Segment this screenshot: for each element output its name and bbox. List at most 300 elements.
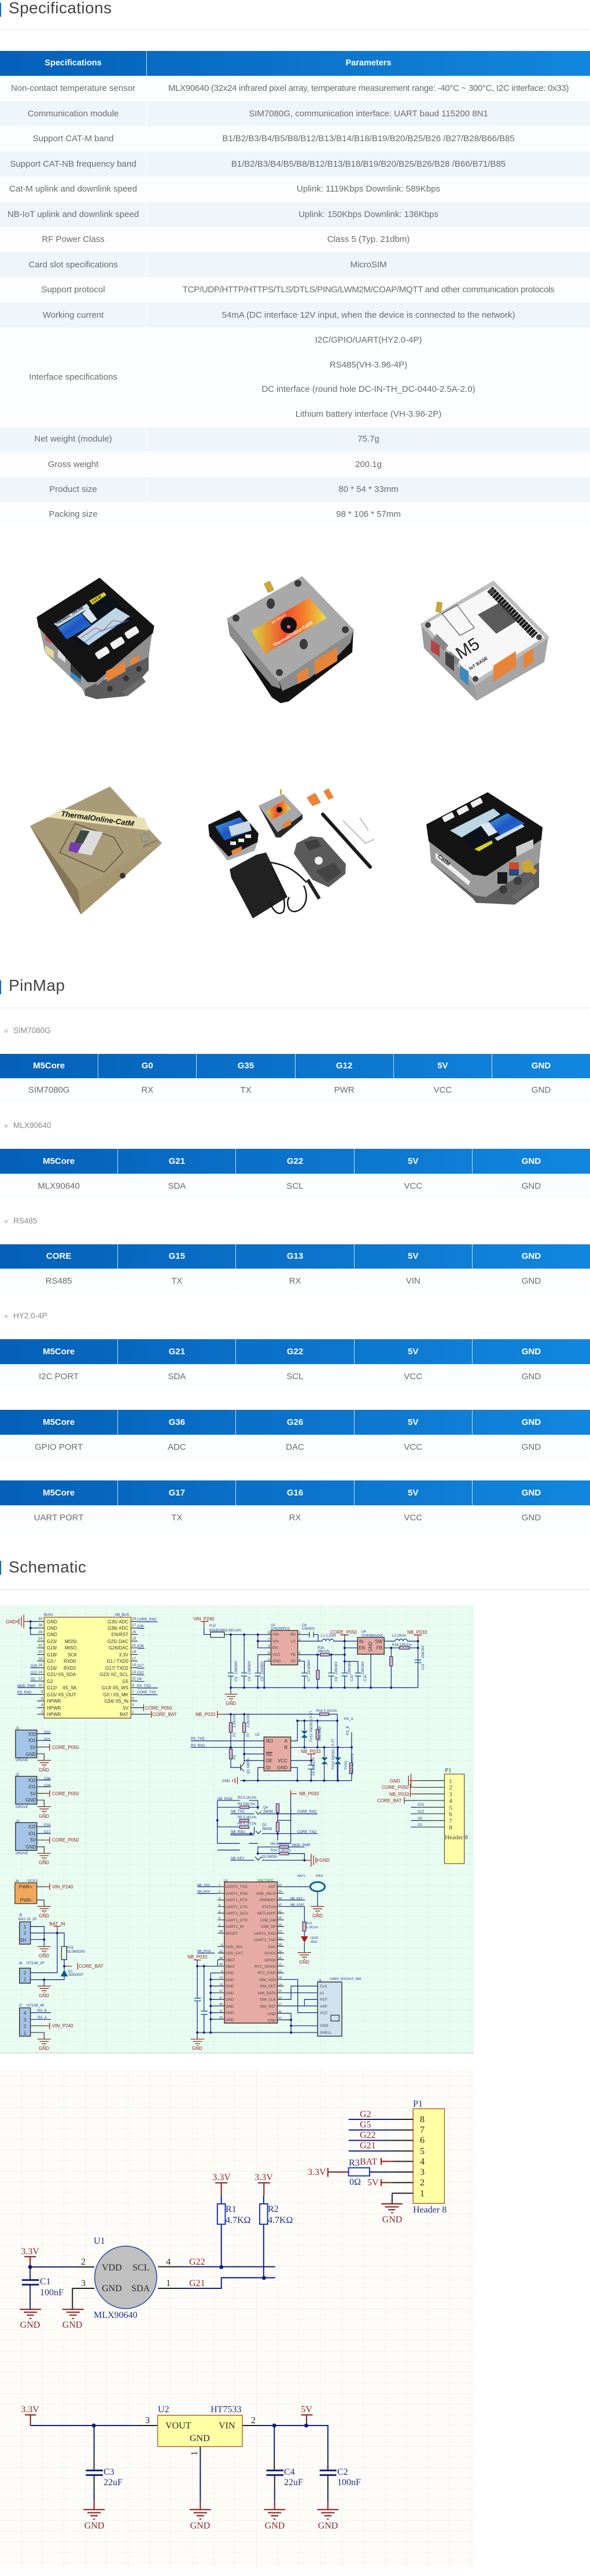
connectors: J5 and J6 battery: SOD4007 — [68, 1974, 84, 1977]
data row: SCL — [286, 1181, 304, 1191]
row: CAT-NB band: Support CAT-NB frequency band — [10, 159, 137, 169]
connector: J4 DC jack — [15, 1880, 73, 1919]
data row: TX — [240, 1085, 252, 1095]
chip: BUS1 connector: 21 — [132, 1644, 137, 1648]
table header row: Specifications — [45, 58, 102, 68]
header row: 5V — [437, 1061, 448, 1071]
circuit: power regulators: C10 — [351, 1674, 354, 1681]
chip: SIM7080G modem: 24 — [278, 1890, 282, 1894]
circuit: Q3 power key: MOD_PWR — [292, 1844, 311, 1847]
circuit: power regulators: VIN — [272, 1633, 279, 1637]
circuit: power regulators: FB — [291, 1653, 296, 1657]
chip: SIM7080G modem: UART1_CTS — [226, 1905, 248, 1909]
chip: SIM7080G modem: RTC_GPIO0 — [255, 1965, 276, 1969]
chip: BUS1 connector: EN/RST — [112, 1632, 128, 1637]
chip: SIM7080G modem: 10 — [278, 1957, 282, 1960]
row: protocol: Support protocol — [41, 285, 105, 295]
connectors: J5 and J6 battery: 2 — [24, 1931, 27, 1936]
circuit: power regulators: FB — [377, 1645, 382, 1651]
chip: BUS1 connector: 29 — [132, 1617, 137, 1621]
row: product size: Product size — [49, 484, 97, 494]
chip: SIM7080G modem: VDD_EXT — [226, 1952, 243, 1956]
sensor U1 MLX90640: SCL — [132, 2263, 149, 2273]
chip: BUS1 connector: G22 — [137, 1671, 144, 1675]
header row: M5Core — [43, 1417, 75, 1427]
chip: BUS1 connector: HPWR — [47, 1712, 61, 1717]
chip: SIM7080G modem: GND — [192, 2046, 202, 2051]
chip: BUS1 connector: G35/ ADC — [108, 1619, 128, 1625]
circuit: Q3 power key: NB_KEY — [231, 1857, 245, 1861]
regulator U2 HT7533: VIN — [219, 2421, 235, 2431]
row: CAT-M band — [0, 126, 590, 152]
circuit: level shifters: S8050 — [263, 1810, 274, 1814]
heading text: PinMap — [9, 976, 65, 994]
circuit: level shifters: R5 5.1K/1% — [238, 1816, 257, 1820]
chip: SIM7080G modem: GND — [226, 2018, 234, 2022]
chip: BUS1 connector: MOD_PWR — [17, 1685, 36, 1688]
chip: BUS1 connector: G16 — [31, 1664, 38, 1668]
connectors: J5 and J6 battery: CORE_BAT — [79, 1964, 104, 1969]
regulator U2 HT7533: GND — [84, 2521, 104, 2531]
chip: SIM7080G modem: NB_STAT — [290, 1903, 305, 1907]
circuit: power regulators: 226/16V — [335, 1662, 338, 1674]
chip: BUS1 connector: G17/ TXD2 — [105, 1666, 129, 1671]
chip: SIM7080G modem: 4 — [219, 1903, 220, 1907]
row: gross weight — [0, 451, 590, 477]
circuit: RS485 transceiver: RS_B — [346, 1726, 350, 1735]
circuit: Q3 power key: R9 5.1K/1% — [271, 1843, 290, 1846]
circuit: level shifters: S8050 — [262, 1828, 272, 1831]
circuit: power regulators: 1D6/50V — [235, 1661, 238, 1674]
circuit: power regulators: SW — [375, 1639, 382, 1644]
connector: J3 grove: CORE_P050 — [52, 1838, 79, 1843]
connectors: J5 and J6 battery: SL0805200 — [67, 1950, 85, 1954]
chip: SIM7080G modem: GND — [226, 2011, 234, 2015]
connector: J7: 2 — [24, 2024, 27, 2029]
connector: P1 header 8: 2 — [449, 1784, 452, 1791]
chip: SIM7080G modem: 7 — [219, 1924, 220, 1927]
regulator U2 HT7533: 2 — [251, 2416, 256, 2426]
circuit: Q3 power key: GND — [319, 1858, 330, 1863]
chip: BUS1 connector: CORE_TXD — [137, 1691, 156, 1695]
connector: P1 header 8: 5 — [449, 1805, 452, 1811]
chip: SIM7080G modem: SIM_CLK — [260, 1998, 276, 2002]
screen: CAT-M — [91, 596, 102, 604]
chip: BUS1 connector: 23 — [132, 1637, 137, 1641]
circuit: RS485 transceiver: TVS2 P6D5C-LF-T7 — [332, 1738, 335, 1770]
connector: J4 DC jack: GND — [39, 1913, 49, 1919]
circuit: power regulators: U3 — [271, 1624, 275, 1627]
circuit: power regulators: EN — [359, 1645, 365, 1651]
circuit: level shifters: R4 51K/1% — [238, 1803, 256, 1806]
row: CAT-NB band — [0, 152, 590, 177]
data row: DAC — [286, 1442, 304, 1452]
chip: SIM7080G modem: 40 — [219, 1950, 223, 1954]
data row — [0, 1269, 590, 1293]
circuit: Q3 power key — [230, 1843, 330, 1867]
header P1: 6 — [420, 2136, 425, 2145]
circuit: power regulators: CORE_P050 — [330, 1630, 357, 1635]
table header row — [0, 51, 590, 76]
circuit: RS485 transceiver: Q1 S8050 — [247, 1758, 250, 1774]
chip: SIM7080G modem: 11 — [278, 1963, 282, 1967]
connector: J2 grove: G36 — [44, 1777, 51, 1781]
schematic panel: thermal sensor — [0, 2069, 474, 2568]
connector: J7: GND — [39, 2046, 49, 2051]
row: communication module: SIM7080G, communication interface: UART baud 115200 8N1 — [249, 109, 488, 119]
chip: BUS1 connector: RXD0 — [64, 1659, 76, 1664]
chip: BUS1 connector: G19/ — [47, 1645, 57, 1651]
chip: SIM7080G modem: 25 — [278, 1924, 282, 1927]
circuit: level shifters: R3 5.1K/1% — [238, 1796, 257, 1800]
connector: J7 — [19, 2004, 73, 2051]
pin table: RS485 — [0, 1244, 590, 1286]
buttons — [442, 798, 483, 822]
pin table: I2C port — [0, 1339, 590, 1381]
heading accent bar — [0, 980, 1, 994]
chip: SIM7080G modem: 21 — [219, 1990, 223, 1993]
chip: BUS1 connector: 16 — [38, 1663, 43, 1667]
circuit: power regulators: NB_P033 — [407, 1630, 427, 1635]
chip: BUS1 connector: G2 — [31, 1678, 36, 1681]
row: interface specifications: Interface specifications — [29, 372, 117, 382]
product photo: device side view — [427, 793, 542, 905]
header P1: R3 — [349, 2158, 360, 2168]
circuit: level shifters: Q2 — [262, 1824, 267, 1827]
circuit: RS485 transceiver: VCC — [278, 1758, 287, 1763]
connector: J1 grove: 5V — [30, 1745, 36, 1750]
circuit: level shifters: Q4 — [263, 1806, 268, 1810]
circuit: power regulators: C8 — [302, 1624, 307, 1627]
data row: RX — [141, 1085, 153, 1095]
regulator U2 HT7533: U2 — [158, 2405, 169, 2415]
circuit: power regulators: 104/50V — [261, 1662, 264, 1674]
header P1: 2 — [420, 2178, 425, 2188]
circuit: level shifters — [217, 1790, 319, 1850]
chip: SIM7080G modem: IO — [320, 1991, 324, 1996]
connectors: J5 and J6 battery: GND — [39, 1953, 49, 1958]
chip: SIM7080G modem: 29 — [278, 1950, 282, 1954]
circuit: power regulators: 4 — [298, 1658, 301, 1662]
chip: BUS1 connector: 5 — [132, 1697, 134, 1701]
header row: G21 — [169, 1347, 185, 1357]
circuit: power regulators: 3 — [268, 1644, 270, 1648]
regulator U2 HT7533: C2 — [337, 2467, 348, 2477]
header P1 — [308, 2099, 447, 2225]
chip: SIM7080G modem: 5.1K/1% — [306, 1926, 318, 1930]
circuit: power regulators: VIN — [272, 1640, 279, 1644]
circuit: power regulators: SS — [290, 1659, 296, 1663]
header row: CORE — [46, 1251, 71, 1261]
header row: G22 — [287, 1156, 303, 1166]
chip: SIM7080G modem: 31 — [219, 2010, 223, 2013]
chip: SIM7080G modem: VCC — [320, 2011, 328, 2015]
chip: SIM7080G modem: SIM_VDD — [259, 1978, 276, 1982]
circuit: power regulators: C4 — [248, 1677, 252, 1681]
data row: TX — [171, 1276, 182, 1286]
accessory: mount plate — [294, 836, 346, 887]
circuit: RS485 transceiver: RS_TXD — [191, 1737, 205, 1741]
circuit: power regulators: 8 — [268, 1631, 270, 1635]
connector: J2 grove: 5V — [30, 1791, 36, 1796]
connector: P1 header 8: 8 — [449, 1824, 452, 1831]
chip: BUS1 connector: CORE_BAT — [152, 1712, 177, 1717]
chip: BUS1 connector: G21 — [31, 1671, 38, 1675]
chip: BUS1 connector: MOSI — [65, 1639, 76, 1644]
header row: G15 — [169, 1251, 185, 1261]
chip: SIM7080G modem: PWRKEY — [260, 1898, 276, 1902]
circuit: RS485 transceiver: R7 — [247, 1732, 250, 1737]
regulator U2 HT7533: 22uF — [104, 2478, 123, 2487]
row: interface specifications: I2C/GPIO/UART(HY2.0-4P) — [315, 335, 422, 345]
chip: BUS1 connector: 20 — [38, 1650, 43, 1654]
connector: J3 grove: GND — [25, 1844, 36, 1850]
chip: BUS1 connector: 8 — [41, 1690, 43, 1694]
sensor U1 MLX90640: MLX90640 — [94, 2310, 138, 2320]
chip: BUS1 connector: GND — [47, 1632, 57, 1637]
circuit: power regulators: BS — [290, 1633, 296, 1637]
pin table: UART port — [0, 1480, 590, 1523]
connector: J7: 1 — [24, 2031, 27, 2036]
chip: SIM7080G modem: GND — [226, 1978, 234, 1982]
data row: GND — [522, 1372, 541, 1381]
header row: 5V — [408, 1347, 418, 1357]
data row: VIN — [406, 1276, 421, 1286]
header row — [0, 1244, 590, 1269]
orange connectors — [431, 640, 533, 686]
circuit: power regulators: SY8089AAAC — [362, 1634, 384, 1638]
chip: SIM7080G modem: ADC — [268, 1945, 276, 1949]
circuit: RS485 transceiver: RS_A — [344, 1718, 353, 1721]
header P1: Header 8 — [413, 2205, 447, 2215]
row: card slot: MicroSIM — [350, 260, 387, 270]
connector: J3 grove: IO1 — [28, 1831, 36, 1836]
chip: BUS1 connector: G17 — [137, 1664, 144, 1668]
connector: J1 grove: GND — [39, 1767, 49, 1773]
chip: BUS1 connector: CORE_RXD — [137, 1618, 157, 1622]
chip: SIM7080G modem: 35 — [219, 1963, 223, 1967]
header P1: 5V — [367, 2178, 379, 2188]
regulator U2 HT7533: 5V — [301, 2405, 312, 2415]
chip: SIM7080G modem: GND — [268, 2012, 276, 2016]
regulator U2 HT7533: GND — [190, 2521, 210, 2531]
chip: SIM7080G modem: SIM_DATA — [257, 1991, 276, 1996]
header P1: GND — [382, 2215, 402, 2225]
pin table: SIM7080G — [0, 1054, 590, 1095]
header row: G21 — [169, 1156, 185, 1166]
connector: J2 grove: G26 — [44, 1784, 51, 1788]
chip: SIM7080G modem: NETLIGHT — [257, 1912, 276, 1916]
chip: BUS1 connector: BUS1 — [44, 1614, 53, 1617]
row: temperature sensor: MLX90640 (32x24 infrared pixel array, temperature measurement range: -40°C ~ 300°C, I2C interface: 0x33) — [168, 83, 569, 93]
chip: BUS1 connector: G26/DAC — [109, 1645, 128, 1651]
circuit: RS485 transceiver: TVS1 P6D5C-LF-T7 — [310, 1710, 314, 1742]
list label: RS485: RS485 — [13, 1217, 37, 1225]
circuit: power regulators: 1D-6/50V — [308, 1660, 311, 1674]
chip: SIM7080G modem: USB_DP — [261, 1925, 276, 1929]
chip: BUS1 connector: G2 — [47, 1679, 53, 1684]
printed device line art — [60, 824, 123, 872]
connector: J3 grove: IO2 — [28, 1824, 36, 1829]
connector: J2 grove: GND — [39, 1814, 49, 1819]
circuit: power regulators: SY8200FCC — [271, 1627, 290, 1631]
connector: J7: 3 — [24, 2018, 27, 2023]
regulator U2 HT7533: VOUT — [165, 2421, 191, 2431]
chip: SIM7080G modem — [187, 1875, 362, 2051]
sensor U1 MLX90640: VDD — [102, 2263, 122, 2273]
chip: BUS1 connector: 3.3V — [119, 1652, 129, 1658]
data row — [0, 1364, 590, 1389]
pin header — [490, 589, 535, 635]
screw holes and slots — [233, 580, 349, 676]
header P1: G5 — [360, 2120, 371, 2130]
front buttons — [94, 626, 140, 660]
header row: G16 — [287, 1488, 303, 1498]
chip: BUS1 connector: 5V — [123, 1706, 129, 1711]
circuit: RS485 transceiver: 2.2K/1% — [247, 1714, 250, 1728]
data row: RX — [289, 1513, 301, 1523]
row: RF power class: Class 5 (Typ. 21dbm) — [327, 234, 410, 244]
chip: SIM7080G modem: 9 — [221, 1943, 223, 1947]
chip: SIM7080G modem: UART2_TXD — [254, 1938, 276, 1942]
circuit: power regulators: L2 10UH — [392, 1634, 406, 1638]
chip: BUS1 connector: G12/ — [47, 1685, 57, 1691]
connector: J7: VIN_P240 — [52, 2023, 73, 2029]
chip: SIM7080G modem: GND — [226, 1971, 234, 1975]
connector: J3 grove: G16 — [44, 1824, 51, 1827]
row: temperature sensor: Non-contact temperature sensor — [11, 83, 135, 93]
connector: J2 grove: GND — [25, 1798, 36, 1803]
circuit: level shifters: R6 5.1K/1% — [238, 1822, 257, 1826]
header row: 5V — [408, 1488, 418, 1498]
data row: MLX90640 — [38, 1181, 80, 1191]
connector: J3 grove: 5V — [30, 1838, 36, 1843]
chip: SIM7080G modem: UART2_RXD — [253, 1932, 276, 1936]
chip: BUS1 connector: 12 — [38, 1677, 43, 1681]
header P1: 3 — [420, 2167, 425, 2177]
sensor U1 MLX90640: SDA — [131, 2284, 150, 2294]
chip: SIM7080G modem: 6 — [219, 1917, 220, 1920]
header row: G35 — [238, 1061, 254, 1071]
heading accent bar — [0, 3, 1, 17]
product photo: device base board view — [421, 582, 548, 701]
chip: BUS1 connector: GND — [47, 1619, 57, 1625]
chip: BUS1 connector — [6, 1614, 177, 1718]
chip: BUS1 connector: G36 — [137, 1625, 144, 1629]
data row: ADC — [168, 1442, 186, 1452]
circuit: power regulators: FU2 — [209, 1625, 216, 1628]
header P1: 7 — [420, 2125, 425, 2135]
connector: J4 DC jack: PWR+ — [19, 1884, 32, 1890]
chip: SIM7080G modem: GND — [320, 2024, 329, 2028]
row: product size: 80 * 54 * 33mm — [338, 484, 399, 494]
circuit: power regulators: VIN_P240 — [193, 1616, 215, 1622]
chip: SIM7080G modem: GND — [312, 1913, 323, 1919]
circuit: power regulators: 6 — [268, 1651, 270, 1655]
chip: BUS1 connector: 1 — [132, 1710, 134, 1714]
circuit: RS485 transceiver: R14 5.1K/1% — [316, 1710, 337, 1713]
regulator U2 HT7533: GND — [265, 2521, 285, 2531]
header P1: BAT — [360, 2157, 377, 2167]
connector: P1 header 8: GND — [390, 1778, 400, 1784]
chip: SIM7080G modem: 2 — [219, 1890, 220, 1894]
row: communication module: Communication module — [28, 109, 119, 119]
circuit: RS485 transceiver: RX1 SNP — [319, 1726, 322, 1741]
list label: HY2.0-4P: HY2.0-4P — [13, 1311, 47, 1320]
chip: BUS1 connector: G25/ DAC — [108, 1639, 128, 1644]
circuit: power regulators: GND — [368, 1641, 373, 1652]
data row: GND — [522, 1181, 541, 1191]
sensor U1 MLX90640 — [20, 2236, 275, 2330]
connector: J4 DC jack: VIN_P240 — [52, 1884, 73, 1890]
chip: SIM7080G modem: CLK — [320, 1985, 327, 1989]
chip: SIM7080G modem: VBAT — [226, 1958, 235, 1963]
schematic panel: main board — [0, 1605, 474, 2053]
row: Cat-M speed — [0, 177, 590, 202]
chip: BUS1 connector: IIS_SK — [62, 1685, 78, 1691]
chip: SIM7080G modem: 22 — [278, 1937, 282, 1941]
chip: BUS1 connector: 3 — [132, 1703, 134, 1707]
header row — [0, 1149, 590, 1174]
circuit: power regulators: R16 — [318, 1647, 325, 1650]
box title: ThermalOnline-CatM — [61, 809, 135, 828]
connectors: J5 and J6 battery: 1 — [24, 1924, 27, 1930]
circuit: power regulators: VCC — [272, 1653, 281, 1657]
accessory: power adapter — [230, 852, 319, 918]
chip: SIM7080G modem: UART1_DCD — [226, 1912, 248, 1916]
chip: SIM7080G modem: 27 — [219, 1997, 223, 2000]
circuit: power regulators: 226/16V — [362, 1662, 365, 1674]
regulator U2 HT7533: 100nF — [337, 2478, 361, 2487]
chip: BUS1 connector: G26 — [137, 1645, 144, 1648]
sensor U1 MLX90640: U1 — [94, 2236, 105, 2246]
chip: SIM7080G modem: USB_VBUS — [256, 1892, 276, 1896]
chip: SIM7080G modem: GPIO0 — [264, 1958, 276, 1963]
chip: SIM7080G modem: UART1_RTS — [226, 1898, 248, 1902]
connector: J2 grove — [16, 1773, 79, 1819]
connector: P1 header 8: NB_P033 — [389, 1792, 410, 1797]
circuit: power regulators: BSMD0805-050-24V — [209, 1629, 241, 1633]
chip: BUS1 connector: BAT — [120, 1712, 128, 1717]
connector: P1 header 8: 6 — [449, 1811, 452, 1818]
chip: SIM7080G modem: 38 — [278, 1943, 282, 1947]
row: packing size: Packing size — [49, 509, 98, 519]
row: NB-IoT speed — [0, 202, 590, 227]
circuit: RS485 transceiver: R2 — [233, 1755, 237, 1759]
connector: P1 header 8: G21 — [418, 1803, 425, 1807]
chip: BUS1 connector: G3 / — [47, 1659, 56, 1664]
chip: SIM7080G modem: 39 — [278, 1897, 282, 1901]
header row: GND — [522, 1156, 541, 1166]
data row — [0, 1174, 590, 1199]
chip: BUS1 connector: GND — [47, 1626, 57, 1631]
chip: BUS1 connector: 22 — [38, 1644, 43, 1648]
specifications table — [0, 51, 590, 519]
chip: BUS1 connector: RXD2 — [64, 1666, 76, 1671]
connectors: J5 and J6 battery: D1 — [68, 1970, 73, 1974]
chip: SIM7080G modem: GND — [226, 1991, 234, 1996]
row: interface specifications: Lithium battery interface (VH-3.96-2P) — [296, 409, 441, 419]
circuit: power regulators: U4 — [362, 1630, 366, 1634]
chip: BUS1 connector: G23/ — [47, 1639, 57, 1644]
circuit: power regulators: C5 — [261, 1677, 264, 1681]
data row — [0, 1505, 590, 1530]
sensor U1 MLX90640: 3.3V — [21, 2247, 39, 2257]
chip: SIM7080G modem: 15 — [278, 1990, 282, 1993]
sensor U1 MLX90640: G22 — [189, 2257, 205, 2267]
chip: SIM7080G modem: VBAT — [226, 1965, 235, 1969]
header P1: 4 — [420, 2157, 425, 2167]
